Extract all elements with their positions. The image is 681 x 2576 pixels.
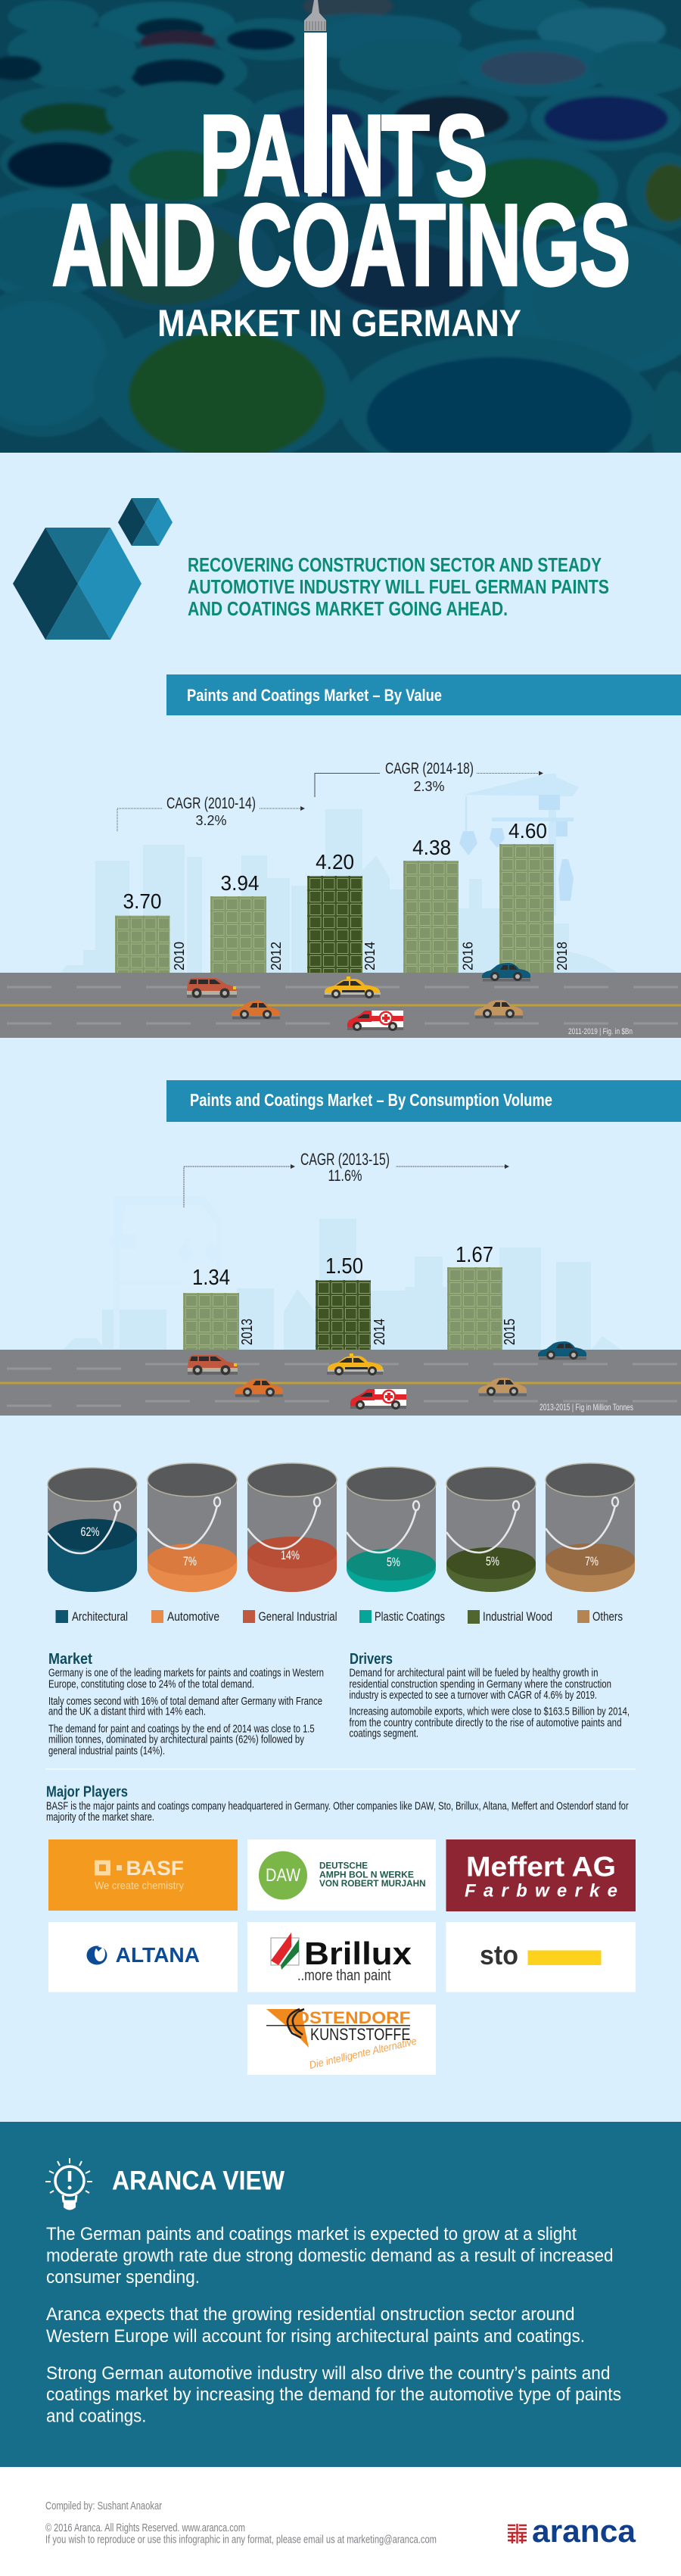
text block: market: general industrial paints (14%). <box>48 1744 165 1758</box>
logo: DAW: VON ROBERT MURJAHN <box>319 1878 426 1889</box>
section banner: by value: Paints and Coatings Market – By Value <box>187 686 442 705</box>
text block: market: Italy comes second with 16% of total demand after Germany with France <box>48 1695 322 1708</box>
chart: market by value <box>0 760 681 1038</box>
legend: Plastic Coatings <box>375 1609 445 1624</box>
logo: Meffert AG <box>446 1839 636 1911</box>
can: others 7% <box>546 1463 635 1592</box>
building 2014 volume <box>316 1280 371 1350</box>
can: automotive 7% <box>148 1463 237 1592</box>
source note: 2011-2019 | Fig. in $Bn <box>568 1027 633 1036</box>
logo: Brillux: Brillux <box>304 1936 412 1971</box>
text block: market: and the UK a distant third with 14% each. <box>48 1705 206 1718</box>
logo: Meffert AG: Meffert AG <box>466 1851 616 1882</box>
building 2010 <box>115 916 169 973</box>
legend: Architectural <box>72 1609 128 1624</box>
bar values <box>123 819 547 913</box>
can: general industrial 14% <box>247 1463 337 1592</box>
label: CAGR 2014-18: CAGR (2014-18) <box>385 760 474 777</box>
label: CAGR 2013-15: CAGR (2013-15) <box>300 1150 390 1169</box>
legend: Automotive <box>167 1609 219 1624</box>
hero: paint cans photo background <box>0 0 681 483</box>
label: CAGR 2010-14 <box>166 795 256 828</box>
hero title <box>52 93 630 344</box>
year labels: 2018 <box>554 942 570 970</box>
building 2012 <box>210 896 266 973</box>
text block: analysis: Aranca expects that the growing residential onstruction sector around <box>46 2304 575 2325</box>
can: plastic coatings 5%: 5% <box>387 1555 400 1569</box>
icon: light bulb <box>45 2158 92 2210</box>
logo: ALTANA: ALTANA <box>116 1943 200 1967</box>
road <box>0 973 681 1038</box>
text block: drivers: industry is expected to see a turnover with CAGR of 4.6% by 2019. <box>350 1689 597 1702</box>
building 2015 <box>447 1267 502 1350</box>
bar values: 4.38 <box>412 836 451 859</box>
legend: Industrial Wood <box>483 1609 552 1624</box>
cars <box>188 1341 586 1409</box>
can: others 7%: 7% <box>585 1554 599 1568</box>
source note: 2013-2015 | Fig in Million Tonnes <box>540 1402 633 1413</box>
footer credits: © 2016 Aranca. All Rights Reserved. www.aranca.com <box>45 2521 245 2534</box>
text block: market: The demand for paint and coatings by the end of 2014 was close to 1.5 <box>48 1723 315 1736</box>
can: automotive 7%: 7% <box>183 1554 197 1568</box>
text block: major players <box>46 1784 629 1824</box>
bar values: 3.70 <box>123 889 162 913</box>
label: CAGR 2013-15 <box>300 1150 390 1185</box>
logo: DAW: DEUTSCHE <box>319 1861 368 1871</box>
heading: aranca view: ARANCA VIEW <box>112 2166 285 2195</box>
text block: major players: majority of the market share. <box>46 1811 154 1824</box>
year labels <box>239 1319 518 1345</box>
arrow: CAGR 2013-15 <box>184 1164 509 1207</box>
arrow: CAGR 2014-18 <box>315 771 543 797</box>
bar values: 4.20 <box>316 850 354 874</box>
intro headline <box>188 553 609 620</box>
logo: Ostendorf Kunststoffe: Die intelligente Alternative <box>308 2035 418 2071</box>
can: plastic coatings 5% <box>347 1467 436 1592</box>
year labels: 2015 <box>502 1319 518 1345</box>
logo: aranca: aranca <box>532 2513 636 2549</box>
chart: consumption volume <box>0 1150 681 1416</box>
legend: Others <box>592 1609 623 1624</box>
label: CAGR 2014-18: 2.3% <box>413 779 445 794</box>
text block: analysis: consumer spending. <box>46 2267 200 2288</box>
label: CAGR 2013-15: 11.6% <box>328 1167 362 1185</box>
skyline and crane backdrop <box>61 774 618 973</box>
can: general industrial 14%: 14% <box>281 1548 300 1562</box>
title line: PAINTS: PAINTS <box>200 93 487 220</box>
logo: DAW: AMPH BOL N WERKE <box>319 1869 414 1880</box>
footer credits: If you wish to reproduce or use this infographic in any format, please email us at marketing@aranca.com <box>45 2534 437 2546</box>
logo: BASF: BASF <box>126 1857 184 1880</box>
year labels: 2016 <box>460 942 476 970</box>
logo: BASF <box>48 1839 238 1911</box>
footer credits: Compiled by: Sushant Anaokar <box>45 2500 162 2512</box>
text block: analysis: coatings market by increasing the demand for the automotive type of paints <box>46 2384 621 2405</box>
text block: analysis: and coatings. <box>46 2406 147 2427</box>
cars <box>187 963 530 1031</box>
logo: DAW: DAW <box>266 1865 300 1886</box>
label: CAGR 2010-14: CAGR (2010-14) <box>166 795 256 812</box>
icon: paint brush with white stroke forming the letter I <box>304 0 327 194</box>
intro headline: AND COATINGS MARKET GOING AHEAD. <box>188 597 508 620</box>
bar values: 3.94 <box>221 871 259 895</box>
year labels <box>171 942 570 970</box>
arrow: CAGR 2010-14 <box>117 806 305 831</box>
logo: Ostendorf Kunststoffe: OSTENDORF <box>295 2008 410 2027</box>
section banner: by value <box>166 674 681 715</box>
legend: General Industrial <box>259 1609 337 1624</box>
text block: drivers: Drivers <box>350 1651 393 1668</box>
logo: DAW <box>247 1839 436 1911</box>
label: CAGR 2010-14: 3.2% <box>195 813 227 828</box>
logo: ALTANA <box>48 1922 238 1992</box>
year labels: 2010 <box>171 942 187 970</box>
logo: Brillux <box>247 1922 436 1992</box>
text block: major players: Major Players <box>46 1784 128 1801</box>
panel: aranca view <box>0 2122 681 2467</box>
text block: drivers <box>350 1651 630 1740</box>
logo: Ostendorf Kunststoffe: KUNSTSTOFFE <box>310 2025 410 2044</box>
bar values <box>192 1243 493 1290</box>
text block: market: Market <box>48 1651 92 1668</box>
text block: analysis: moderate growth rate due strong domestic demand as a result of increased <box>46 2245 613 2266</box>
section banner: by consumption volume <box>166 1080 681 1122</box>
can: industrial wood 5%: 5% <box>486 1554 499 1568</box>
skyline and crane backdrop <box>63 1196 621 1350</box>
building 2014 <box>307 876 362 973</box>
text block: analysis: The German paints and coatings market is expected to grow at a slight <box>46 2224 577 2244</box>
road <box>0 1350 681 1416</box>
logo: BASF: We create chemistry <box>95 1879 184 1891</box>
text block: market: Germany is one of the leading markets for paints and coatings in Western <box>48 1667 324 1680</box>
can: architectural 62% <box>48 1468 137 1592</box>
title line: MARKET IN GERMANY: MARKET IN GERMANY <box>157 302 521 344</box>
building 2013 <box>183 1293 239 1350</box>
text block: drivers: Demand for architectural paint will be fueled by healthy growth in <box>350 1667 598 1680</box>
text block: market <box>48 1651 324 1758</box>
building 2016 <box>403 861 459 973</box>
can: architectural 62%: 62% <box>80 1525 100 1539</box>
building 2018 <box>499 844 554 973</box>
footer panel <box>0 2467 681 2576</box>
text block: analysis <box>46 2224 621 2427</box>
logo: sto: sto <box>480 1939 518 1970</box>
year labels: 2012 <box>268 942 284 970</box>
label: CAGR 2014-18 <box>385 760 474 794</box>
text block: drivers: coatings segment. <box>350 1727 418 1740</box>
year labels: 2013 <box>239 1319 256 1345</box>
bar values: 1.67 <box>456 1243 493 1267</box>
text block: analysis: Strong German automotive industry will also drive the country’s paints and <box>46 2363 610 2384</box>
bar values: 1.50 <box>325 1254 363 1279</box>
section banner: by consumption volume: Paints and Coatings Market – By Consumption Volume <box>190 1090 552 1110</box>
text block: market: Europe, constituting close to 24% of the total demand. <box>48 1678 254 1691</box>
logo: Brillux: ..more than paint <box>297 1967 391 1984</box>
text block: market: million tonnes, dominated by architectural paints (62%) followed by <box>48 1733 304 1746</box>
year labels: 2014 <box>372 1319 388 1345</box>
bar values: 1.34 <box>192 1266 230 1290</box>
year labels: 2014 <box>362 942 378 970</box>
legend <box>56 1609 623 1624</box>
footer credits <box>45 2500 437 2546</box>
text block: analysis: Western Europe will account for rising architectural paints and coatings. <box>46 2326 585 2347</box>
logo: sto <box>446 1922 636 1992</box>
logo: Ostendorf Kunststoffe <box>247 2004 436 2075</box>
icon: small hexagon <box>118 498 173 546</box>
logo: Meffert AG: Farbwerke <box>465 1880 617 1901</box>
icon: large hexagon <box>13 528 141 640</box>
bar values: 4.60 <box>508 819 547 843</box>
can: industrial wood 5% <box>446 1467 536 1592</box>
chart: paint can segment shares <box>48 1463 635 1592</box>
